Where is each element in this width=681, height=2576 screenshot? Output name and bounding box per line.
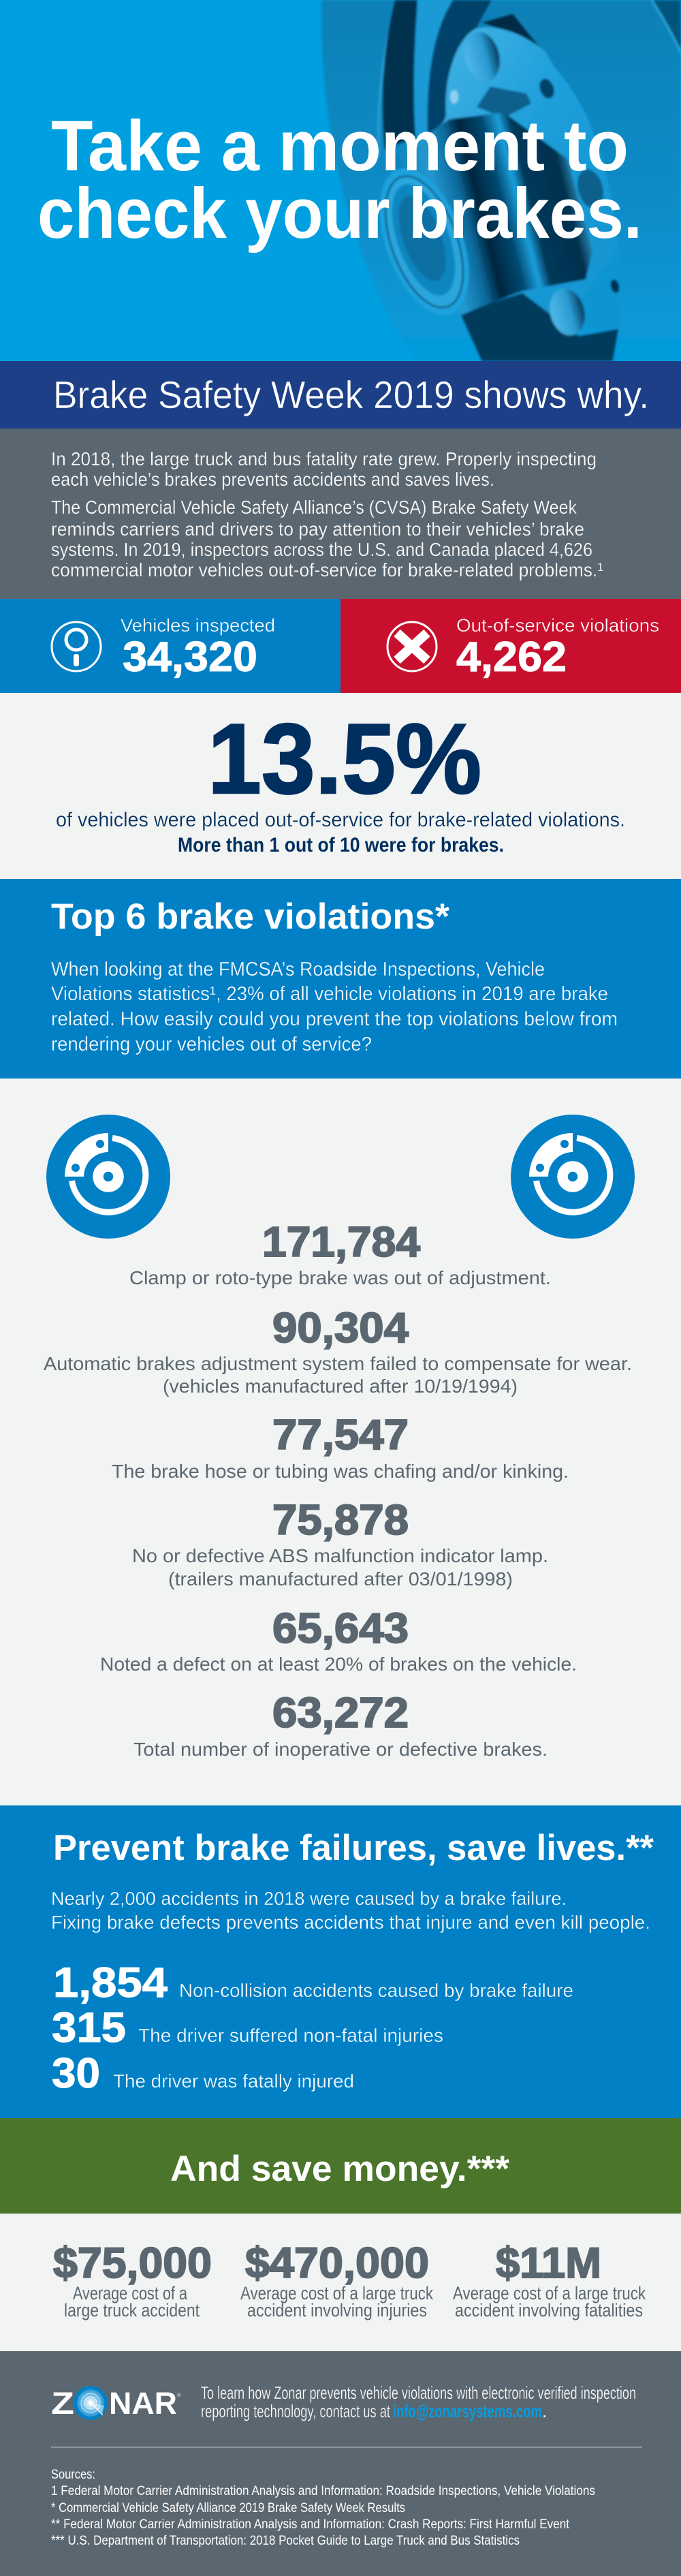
violation 4: (trailers manufactured after 03/01/1998) [168, 1568, 513, 1589]
cost 2: $470,000 [245, 2239, 429, 2287]
stat: non-collision accidents: Non-collision accidents caused by brake failure [179, 1980, 573, 2001]
image: brake rotor and hub [321, 0, 681, 361]
paragraph: Nearly 2,000 accidents in 2018 were caused by a brake failure. [51, 1888, 567, 1909]
cost 2 [240, 2239, 433, 2321]
title: check your brakes. [37, 174, 642, 253]
violation 6 [133, 1690, 548, 1760]
stat: fatal injuries: 30 [52, 2050, 100, 2097]
heading: Prevent brake failures, save lives.** [53, 1828, 654, 1868]
panel: top 6 list [0, 1078, 681, 1806]
panel: introduction [0, 429, 681, 599]
panel: accident costs [0, 2214, 681, 2351]
contact text: reporting technology, contact us at [201, 2401, 391, 2421]
label: Vehicles inspected [121, 615, 275, 636]
contact text [201, 2383, 636, 2421]
stat: non-collision accidents: 1,854 [53, 1959, 168, 2006]
sources [51, 2468, 595, 2548]
panel: prevent brake failures [0, 1805, 681, 2118]
violation 3: The brake hose or tubing was chafing and/or kinking. [112, 1461, 569, 1482]
title: Take a moment to [51, 106, 629, 186]
icon: Zonar logo [51, 2386, 181, 2421]
icon: Zonar logo: NAR [109, 2386, 177, 2421]
big percentage: 13.5% [208, 703, 481, 814]
stat: non-fatal injuries: The driver suffered non-fatal injuries [138, 2025, 443, 2046]
sources: Sources: [51, 2468, 95, 2482]
panel: vehicles inspected stat [0, 599, 340, 693]
violation 5: Noted a defect on at least 20% of brakes on the vehicle. [100, 1654, 577, 1675]
panel: footer [0, 2351, 681, 2576]
icon: brake disc right [511, 1115, 635, 1239]
icon: Zonar logo: ® [177, 2393, 181, 2398]
violation 2: 90,304 [272, 1305, 409, 1352]
intro paragraph two: reminds carriers and drivers to pay attention to their vehicles’ brake [51, 518, 584, 540]
heading: And save money.*** [170, 2149, 509, 2189]
callout emphasis: More than 1 out of 10 were for brakes. [178, 834, 504, 856]
stat: fatal injuries: The driver was fatally injured [113, 2070, 354, 2092]
violation 5 [100, 1605, 577, 1675]
stat: non-fatal injuries: 315 [52, 2004, 126, 2051]
panel: hero banner [0, 0, 681, 361]
cost 2: accident involving injuries [247, 2300, 427, 2321]
violation 4 [132, 1497, 548, 1589]
paragraph: related. How easily could you prevent the top violations below from [51, 1008, 618, 1030]
panel: out-of-service stat [340, 599, 681, 693]
subtitle: Brake Safety Week 2019 shows why. [53, 373, 649, 417]
intro paragraph two: commercial motor vehicles out-of-service for brake-related problems.¹ [51, 559, 603, 580]
violation 1: 171,784 [262, 1219, 421, 1266]
cost 2: Average cost of a large truck [240, 2283, 433, 2303]
panel: 13.5 percent callout [0, 693, 681, 879]
violation 6: 63,272 [272, 1690, 409, 1737]
cost 3: $11M [496, 2239, 601, 2287]
contact text: . [542, 2401, 547, 2421]
violation 1: Clamp or roto-type brake was out of adjustment. [129, 1267, 551, 1288]
violation 3 [112, 1412, 569, 1482]
intro paragraph two: The Commercial Vehicle Safety Alliance’s (CVSA) Brake Safety Week [51, 497, 577, 518]
violation 2: Automatic brakes adjustment system failed to compensate for wear. [44, 1353, 632, 1374]
violation 3: 77,547 [272, 1412, 409, 1459]
stat: non-fatal injuries [52, 2004, 443, 2051]
cost 3 [453, 2239, 646, 2321]
cost 1: $75,000 [53, 2239, 212, 2287]
number: 4,262 [456, 634, 567, 681]
cost 3: Average cost of a large truck [453, 2283, 646, 2303]
paragraph [51, 1888, 650, 1933]
stat: non-collision accidents [53, 1959, 573, 2006]
intro paragraph one: In 2018, the large truck and bus fatality rate grew. Properly inspecting [51, 448, 597, 469]
violation 1 [129, 1219, 551, 1288]
callout description: of vehicles were placed out-of-service for brake-related violations. [56, 809, 625, 831]
cost 3: accident involving fatalities [455, 2300, 643, 2321]
icon: Zonar logo: Z [51, 2386, 74, 2421]
paragraph: Violations statistics¹, 23% of all vehicle violations in 2019 are brake [51, 983, 608, 1005]
cost 1: Average cost of a [73, 2283, 188, 2303]
cost 1 [53, 2239, 212, 2321]
violation 2: (vehicles manufactured after 10/19/1994) [163, 1376, 518, 1397]
violation 6: Total number of inoperative or defective brakes. [133, 1739, 548, 1760]
number: 34,320 [123, 634, 257, 681]
intro paragraph one: each vehicle’s brakes prevents accidents and saves lives. [51, 469, 494, 490]
contact text: info@zonarsystems.com [393, 2401, 542, 2421]
heading: Top 6 brake violations* [51, 897, 449, 937]
panel: save money band [0, 2118, 681, 2214]
stat: fatal injuries [52, 2050, 354, 2097]
paragraph: Fixing brake defects prevents accidents that injure and even kill people. [51, 1912, 650, 1933]
violation 2 [44, 1305, 632, 1397]
title [37, 106, 642, 253]
sources: ** Federal Motor Carrier Administration Analysis and Information: Crash Reports: First Harmful Event [51, 2517, 570, 2532]
intro paragraph two: systems. In 2019, inspectors across the U.S. and Canada placed 4,626 [51, 539, 592, 560]
intro paragraph one [51, 448, 597, 490]
icon: X in circle [387, 622, 437, 671]
icon: magnifying glass [52, 622, 101, 671]
panel: subtitle band [0, 361, 681, 429]
label: Out-of-service violations [456, 615, 659, 636]
intro paragraph two [51, 497, 603, 580]
paragraph [51, 959, 618, 1055]
violation 4: No or defective ABS malfunction indicator lamp. [132, 1545, 548, 1566]
violation 4: 75,878 [272, 1497, 409, 1544]
panel: top 6 intro [0, 879, 681, 1078]
paragraph: When looking at the FMCSA’s Roadside Inspections, Vehicle [51, 959, 545, 980]
sources: 1 Federal Motor Carrier Administration Analysis and Information: Roadside Inspections, Vehicle Violations [51, 2484, 595, 2498]
sources: * Commercial Vehicle Safety Alliance 2019 Brake Safety Week Results [51, 2501, 405, 2515]
violation 5: 65,643 [272, 1605, 409, 1652]
cost 1: large truck accident [64, 2300, 200, 2321]
paragraph: rendering your vehicles out of service? [51, 1034, 372, 1055]
icon: brake disc left [46, 1115, 170, 1239]
sources: *** U.S. Department of Transportation: 2018 Pocket Guide to Large Truck and Bus Statistics [51, 2534, 520, 2548]
